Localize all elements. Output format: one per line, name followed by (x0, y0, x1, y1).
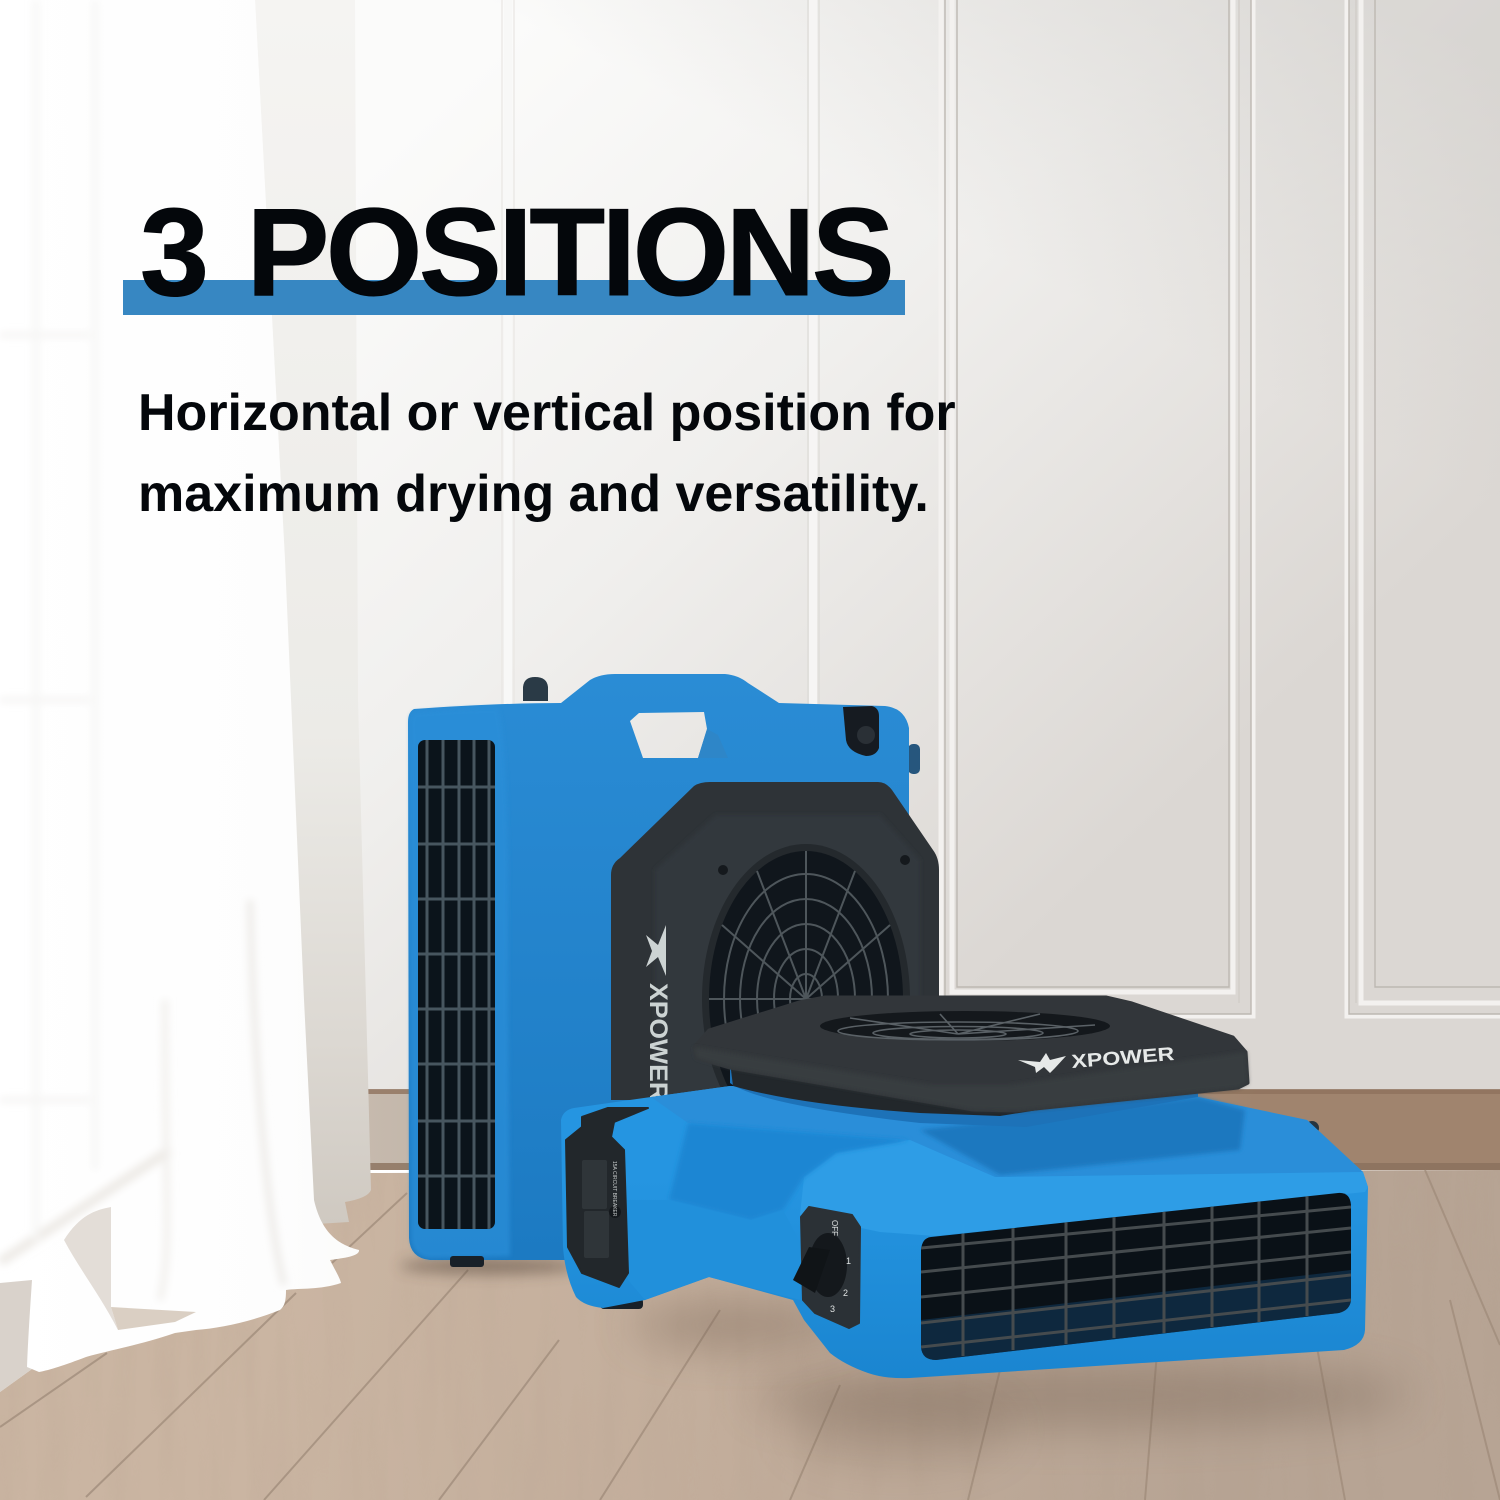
sheer folds and window frame seen through curtain (0, 0, 284, 1300)
speed dial (793, 1207, 860, 1328)
handle inner side (698, 729, 728, 758)
shroud screws (718, 855, 910, 875)
beige curtain (255, 0, 371, 1224)
dark collar (730, 1062, 1100, 1116)
blue collar ring (730, 1062, 1198, 1127)
title: 3 POSITIONS (140, 184, 891, 322)
breaker caption: 15A CIRCUIT BREAKER (611, 1161, 617, 1217)
black top shroud (694, 997, 1248, 1111)
upright brand logo (646, 925, 666, 976)
sloped highlight (800, 1140, 1368, 1236)
window sill base (0, 1200, 118, 1392)
breaker button (609, 1206, 621, 1218)
description text: Horizontal or vertical position for (138, 384, 956, 442)
flat body (561, 1086, 1368, 1378)
wooden floor (0, 1170, 1500, 1500)
upright body (408, 674, 909, 1260)
top deck (651, 1086, 1363, 1177)
baseboard (360, 1089, 1500, 1170)
front vent grille (921, 1193, 1351, 1362)
fan grille (702, 844, 910, 1154)
upper outlet (582, 1160, 607, 1209)
top fan opening (820, 1011, 1110, 1041)
flat air mover (561, 997, 1368, 1378)
deck shadow (920, 1097, 1245, 1175)
description text (138, 384, 956, 523)
wall panel mouldings (502, 0, 1500, 1016)
rear side knob (1305, 1121, 1319, 1135)
outlet panel (566, 1108, 648, 1287)
shroud inner shade (655, 815, 920, 1100)
right knob (908, 744, 920, 774)
speed dial: OFF (830, 1220, 839, 1236)
handle recess (669, 1123, 910, 1220)
wall (0, 0, 1500, 1100)
top latch (843, 706, 879, 756)
shroud front lip (694, 1047, 1248, 1111)
speed dial: 2 (843, 1288, 848, 1298)
description text: maximum drying and versatility. (138, 465, 929, 523)
speed dial: 1 (846, 1256, 851, 1266)
top knob (523, 677, 548, 701)
black front shroud (611, 782, 939, 1100)
flat brand logo (1018, 1053, 1066, 1073)
foot (450, 1256, 484, 1267)
foot (600, 1298, 643, 1309)
heading underline bar (123, 280, 905, 315)
lower outlet (584, 1211, 609, 1258)
curtain gap showing floor (111, 1307, 196, 1330)
curtain gap showing wall base (64, 1207, 118, 1330)
side face highlight (410, 708, 510, 1258)
upright brand label: XPOWER (644, 983, 672, 1101)
side vent grille (418, 740, 495, 1229)
upright air mover (408, 674, 939, 1267)
handle bar lower shade (620, 1200, 804, 1300)
speed dial: 3 (830, 1304, 835, 1314)
floor shadows (400, 1258, 1410, 1466)
flat brand label: XPOWER (1071, 1044, 1175, 1073)
sheer curtain (0, 0, 359, 1372)
